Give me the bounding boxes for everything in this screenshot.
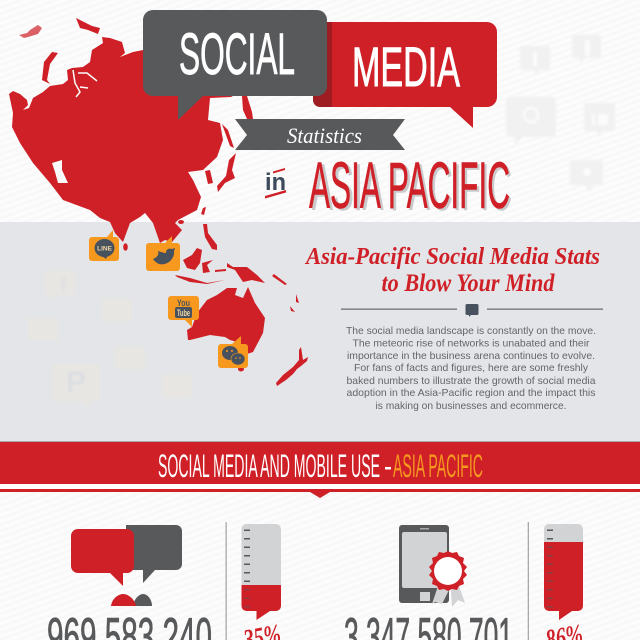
Asia mainland [9,37,300,243]
section banner: social media and mobile use: ASIA PACIFIC [393,448,483,484]
Borneo [183,248,202,270]
intro paragraph: is making on businesses and ecommerce. [376,400,566,412]
Australia [187,287,265,354]
ribbon: Statistics [235,119,405,150]
icon: YouTube callout: You [177,298,190,308]
icon: smartphone with award rosette [399,525,467,607]
Sulawesi [202,260,213,273]
gauge: 35 percent [241,524,283,640]
Sumatra and Java [175,275,225,284]
Sakhalin, Kurils, Japan, Korea, Taiwan [242,96,253,119]
ribbon: Statistics: Statistics [287,123,362,148]
Philippines [203,224,217,250]
icon: Twitter callout [146,236,180,271]
panel: intro grey band [0,222,640,441]
New Guinea [227,263,265,283]
heading: stats to blow your mind [304,244,600,297]
inlets of the northern coast [73,70,97,97]
title: Asia Pacific [309,148,512,224]
icon: LINE callout [89,230,119,261]
heading: stats to blow your mind: Asia-Pacific Social Media Stats [304,244,600,270]
intro paragraph: importance in the business arena continues to evolve. [347,350,595,362]
map: Asia Pacific [9,18,308,386]
divider with chat icon [341,304,603,317]
intro paragraph: The social media landscape is constantly on the move. [346,325,596,337]
intro paragraph: baked numbers to illustrate the growth of social media [346,375,596,387]
faint social icons: grey band: f [60,275,67,297]
heading: stats to blow your mind: to Blow Your Mind [382,270,555,297]
divider [226,522,227,640]
icon: LINE callout: LINE [97,246,113,252]
intro paragraph: The meteoric rise of networks is unabated and their [352,338,590,350]
divider [528,522,529,640]
word: in: in [265,169,286,196]
Tasmania [238,366,244,372]
small Pacific islands [215,269,299,312]
icon: WeChat callout [218,336,248,368]
Sri Lanka and Hainan [123,243,128,251]
section banner: social media and mobile use: - [384,448,392,484]
speech bubble: Social [143,10,327,120]
intro paragraph [346,325,596,412]
faint social icons: grey band [28,271,192,409]
intro paragraph: For fans of facts and figures, here are some freshly [354,362,589,374]
speech bubble: Media: MEDIA [352,35,460,98]
faint social icons: upper right [506,35,615,192]
icon: two people talking [71,525,182,606]
speech bubble: Media [313,22,497,128]
speech bubble: Social: SOCIAL [179,22,295,87]
section banner: social media and mobile use [0,441,640,498]
northern islands [76,18,100,34]
gauge: 86 percent [543,524,585,640]
New Zealand [276,347,308,386]
faint social icons: grey band: P [66,366,86,399]
intro paragraph: adoption in the Asia-Pacific region and the impact this [346,387,596,399]
icon: YouTube callout: Tube [177,308,190,318]
icon: YouTube callout [168,296,199,327]
